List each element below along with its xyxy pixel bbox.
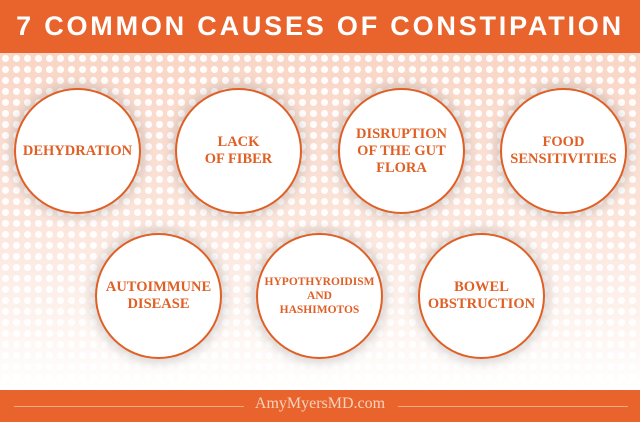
circle: disruption of gut flora: FLORA [376, 160, 427, 176]
circle: disruption of gut flora: OF THE GUT [357, 142, 446, 158]
circle: bowel obstruction: BOWEL [454, 279, 509, 295]
circle: food sensitivities: SENSITIVITIES [510, 151, 617, 167]
circle: autoimmune disease: AUTOIMMUNE [106, 279, 211, 295]
circle: disruption of gut flora: DISRUPTION [356, 126, 447, 142]
circle: lack of fiber: LACK [218, 134, 259, 150]
circle: bowel obstruction [418, 233, 545, 359]
circle: dehydration: DEHYDRATION [23, 142, 132, 158]
circle: bowel obstruction: OBSTRUCTION [428, 296, 535, 312]
circle: lack of fiber: OF FIBER [205, 151, 272, 167]
circle: hypothyroidism: AND [307, 290, 332, 302]
circle: food sensitivities [500, 88, 627, 214]
circle: autoimmune disease [95, 233, 222, 359]
circle: food sensitivities: FOOD [543, 134, 584, 150]
circle: dehydration [14, 88, 141, 214]
footer: AmyMyersMD.com [255, 395, 385, 412]
circle: hypothyroidism: HYPOTHYROIDISM [265, 276, 374, 288]
title [0, 0, 640, 53]
circle: lack of fiber [175, 88, 302, 214]
circle: disruption of gut flora [338, 88, 465, 214]
footer [0, 390, 640, 422]
title: 7 COMMON CAUSES OF CONSTIPATION [16, 11, 624, 41]
circle: hypothyroidism: HASHIMOTOS [280, 304, 359, 316]
circle: hypothyroidism [256, 233, 383, 359]
circle: autoimmune disease: DISEASE [127, 296, 190, 312]
